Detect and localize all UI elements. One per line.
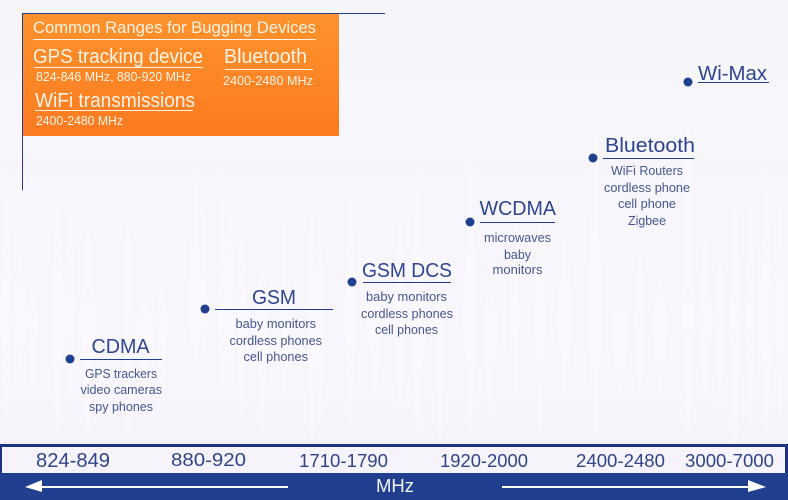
frequency labels — [36, 450, 774, 472]
arrow: right — [502, 480, 766, 492]
axis base band — [0, 473, 788, 500]
panel frame lines — [22, 14, 385, 190]
band: GSM DCS: baby monitors — [366, 290, 447, 304]
band: GSM DCS: GSM DCS — [362, 260, 452, 282]
band: GSM: cordless phones — [230, 334, 322, 348]
background waveform — [0, 95, 785, 450]
range: GPS tracking device: GPS tracking device — [33, 46, 203, 68]
band: GSM DCS: cordless phones — [361, 307, 453, 321]
range: GPS tracking device — [33, 46, 203, 84]
band: CDMA — [66, 336, 162, 414]
frequency labels: 2400-2480 — [576, 450, 665, 471]
band: GSM DCS — [348, 260, 453, 337]
band: CDMA: spy phones — [89, 400, 153, 414]
band: WCDMA — [466, 198, 557, 277]
band: CDMA: CDMA — [92, 336, 150, 358]
band: WCDMA: microwaves — [484, 231, 551, 245]
band: CDMA: GPS trackers — [85, 367, 157, 381]
band: CDMA: video cameras — [80, 383, 162, 397]
frequency labels: 1920-2000 — [440, 450, 528, 471]
band: Bluetooth: Zigbee — [628, 214, 666, 228]
range: WiFi transmissions: WiFi transmissions — [35, 90, 195, 112]
arrow: left — [25, 480, 288, 492]
band: WCDMA: monitors — [492, 263, 542, 277]
band: Bluetooth: cell phone — [618, 197, 676, 211]
frequency labels: 880-920 — [171, 450, 246, 470]
orange panel: common ranges — [22, 14, 385, 190]
orange panel background — [23, 14, 339, 136]
frequency axis bar — [0, 444, 788, 500]
range: Bluetooth — [223, 46, 313, 88]
frequency labels: 3000-7000 — [685, 450, 774, 471]
range: WiFi transmissions: 2400-2480 MHz — [36, 114, 123, 128]
band: Bluetooth: cordless phone — [604, 181, 690, 195]
axis strip — [0, 444, 788, 474]
axis strip interior — [2, 447, 785, 473]
range: WiFi transmissions — [35, 90, 195, 128]
panel heading: Common Ranges for Bugging Devices — [33, 18, 316, 37]
range: GPS tracking device: 824-846 MHz, 880-920 MHz — [36, 70, 191, 84]
range: Bluetooth: Bluetooth — [224, 46, 307, 68]
frequency labels: 824-849 — [36, 450, 110, 472]
band: WCDMA: baby — [504, 248, 532, 262]
band: Wi-Max: Wi-Max — [698, 63, 767, 85]
band: GSM DCS: cell phones — [375, 323, 438, 337]
band: GSM: cell phones — [244, 350, 308, 364]
unit label: MHz — [376, 476, 414, 496]
band: Bluetooth — [588, 135, 695, 228]
band: Bluetooth: Bluetooth — [605, 135, 695, 157]
band: GSM — [200, 287, 333, 364]
range: Bluetooth: 2400-2480 MHz — [223, 74, 313, 88]
band: Bluetooth: WiFi Routers — [611, 164, 683, 178]
band: GSM: GSM — [252, 287, 296, 309]
band: WCDMA: WCDMA — [480, 198, 557, 220]
frequency labels: 1710-1790 — [299, 450, 388, 471]
band: GSM: baby monitors — [236, 317, 316, 331]
